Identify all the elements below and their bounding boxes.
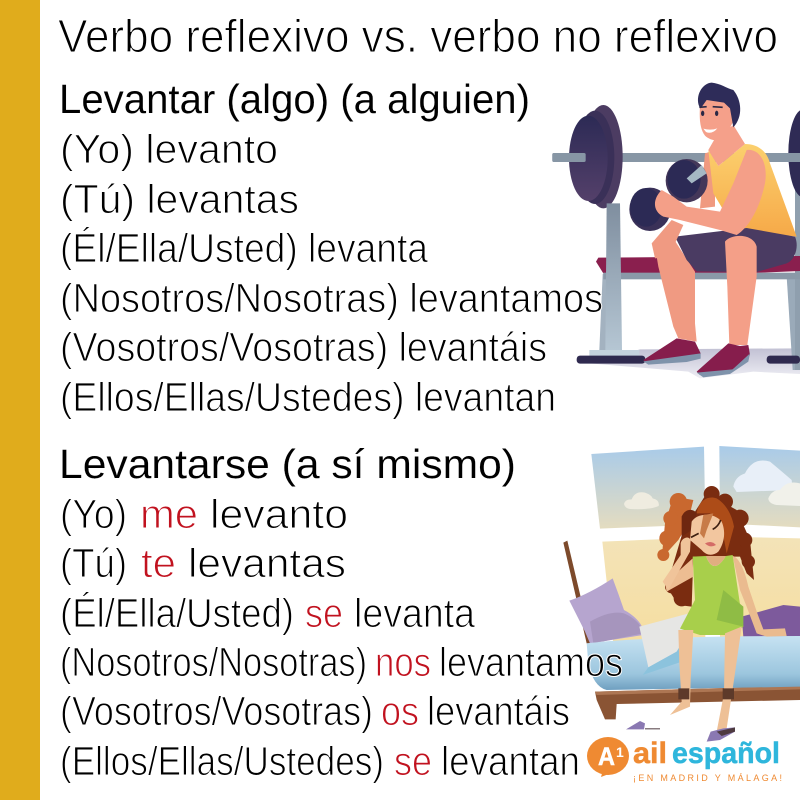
- conjugation: ellos se: se: [394, 738, 432, 784]
- right rack: [787, 277, 799, 370]
- conjugation: ellos se: levantan: [441, 738, 580, 784]
- conjugation: vosotros os: (Vosotros/Vosotras): [60, 688, 373, 734]
- duvet: [742, 605, 800, 637]
- conjugation: él se: (Él/Ella/Usted): [60, 590, 294, 636]
- logo wordmark: ail: [633, 737, 667, 770]
- heading: Levantarse: Levantarse (a sí mismo): [59, 441, 516, 487]
- illustration: sleepy woman sitting on a bed: [563, 446, 800, 742]
- dress: [680, 555, 743, 635]
- panel: non-reflexive conjugation: [59, 76, 603, 420]
- barbell bar: [552, 153, 800, 162]
- left leg: [655, 238, 697, 342]
- hair: [698, 83, 740, 127]
- conjugation: nosotros nos: (Nosotros/Nosotras): [60, 639, 367, 685]
- title: Verbo reflexivo vs. verbo no reflexivo: [58, 10, 778, 62]
- face: [690, 515, 724, 555]
- neck: [708, 125, 745, 166]
- conjugation: tú: (Tú) levantas: [60, 176, 299, 222]
- conjugation: tú te: [60, 540, 346, 586]
- bench seat: [596, 256, 800, 273]
- legs: [670, 630, 693, 715]
- logo: AIL español: [587, 737, 782, 783]
- conjugation: él se: se: [305, 590, 343, 636]
- sidebar: mustard band: [0, 0, 40, 800]
- arm: [655, 150, 766, 235]
- logo: AIL español: español: [672, 737, 780, 770]
- left rack upright: [599, 274, 608, 350]
- bed frame: [595, 686, 800, 719]
- conjugation: él se: [60, 590, 475, 636]
- hand on knee: [652, 220, 683, 258]
- illustration: man lifting weights on a bench: [552, 83, 800, 378]
- conjugation: nosotros: (Nosotros/Nosotras) levantamos: [60, 275, 603, 321]
- conjugation: nosotros nos: nos: [375, 639, 431, 685]
- pillow: [569, 578, 644, 643]
- white sheet: [639, 613, 692, 667]
- eyes, brows and smile: [701, 111, 704, 116]
- conjugation: vosotros os: os: [381, 688, 419, 734]
- conjugation: vosotros os: levantáis: [427, 688, 570, 734]
- arms: [665, 558, 693, 592]
- hair, top front: [697, 497, 734, 553]
- conjugation: yo me: (Yo): [60, 491, 127, 537]
- conjugation: él se: levanta: [354, 590, 475, 636]
- clouds: [624, 492, 659, 509]
- conjugation: yo me: [60, 491, 348, 537]
- conjugation: nosotros nos: [60, 639, 623, 685]
- conjugation: yo me: levanto: [210, 491, 348, 537]
- conjugation: nosotros nos: levantamos: [439, 639, 623, 685]
- head: [700, 98, 735, 140]
- back arm and torso: [700, 150, 715, 208]
- conjugation: yo me: me: [140, 491, 198, 537]
- window panes: [591, 447, 705, 529]
- conjugation: él: (Él/Ella/Usted) levanta: [60, 225, 428, 271]
- conjugation: yo: (Yo) levanto: [60, 126, 278, 172]
- right weight plate: [788, 109, 800, 197]
- icon: speech bubble: [587, 737, 629, 777]
- shorts: [675, 228, 797, 272]
- conjugation: tú te: (Tú): [60, 540, 127, 586]
- icon: speech bubble: 1: [616, 744, 624, 760]
- shoes: [643, 338, 701, 363]
- conjugation: ellos se: (Ellos/Ellas/Ustedes): [60, 738, 384, 784]
- heading: Levantar: Levantar (algo) (a alguien): [59, 76, 530, 122]
- mattress: [587, 636, 800, 690]
- icon: speech bubble: A: [598, 743, 615, 771]
- conjugation: tú te: levantas: [188, 540, 346, 586]
- conjugation: tú te: te: [141, 540, 176, 586]
- slippers: [707, 727, 735, 742]
- hair, front left curls: [657, 493, 693, 561]
- bed post: [563, 541, 592, 643]
- conjugation: vosotros: (Vosotros/Vosotras) levantáis: [60, 324, 547, 370]
- left weight plates: [584, 105, 623, 208]
- dumbbell: [629, 188, 671, 231]
- hair, back layer: [665, 486, 755, 607]
- right leg: [725, 236, 757, 345]
- floor shadow: [590, 348, 800, 378]
- panel: reflexive conjugation: [59, 441, 623, 784]
- conjugation: ellos: (Ellos/Ellas/Ustedes) levantan: [60, 374, 556, 420]
- logo tagline: ¡EN MADRID Y MÁLAGA!: [633, 773, 782, 783]
